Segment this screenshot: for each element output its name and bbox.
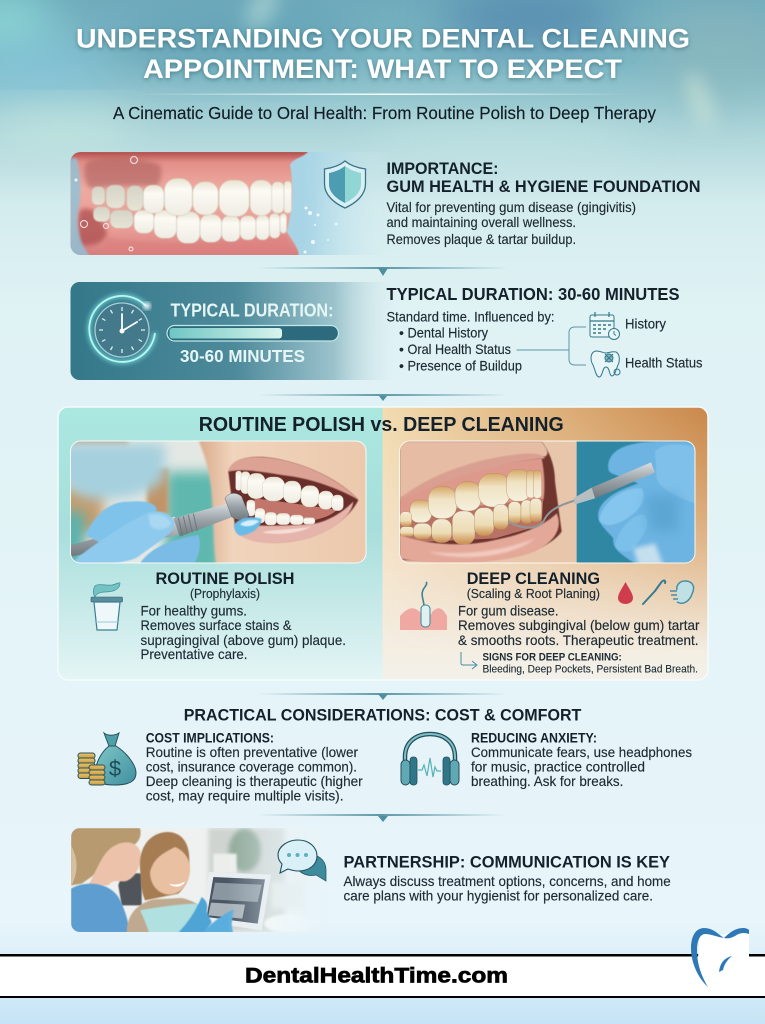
arrow: connector 3 <box>258 693 508 700</box>
heading: practical considerations: PRACTICAL CONSIDERATIONS: COST & COMFORT <box>184 706 582 724</box>
title <box>76 24 690 84</box>
icon: speech bubbles <box>278 840 326 881</box>
text: importance: Removes plaque & tartar buildup. <box>386 231 576 247</box>
text: reducing anxiety: REDUCING ANXIETY: <box>471 730 597 746</box>
text: routine polish <box>140 569 346 662</box>
text: signs for deep cleaning: Bleeding, Deep Pockets, Persistent Bad Breath. <box>482 664 698 676</box>
label: history: History <box>625 316 666 332</box>
text: reducing anxiety <box>471 730 692 789</box>
photo: healthy teeth <box>70 152 361 255</box>
photo: routine polish <box>71 442 366 562</box>
text: cost implications <box>146 730 363 804</box>
photo: deep cleaning <box>400 442 694 562</box>
text: duration details <box>386 284 680 374</box>
text: deep cleaning <box>458 569 700 648</box>
icon: dental pick <box>643 580 665 604</box>
label: typical duration: TYPICAL DURATION: <box>170 300 334 320</box>
icon: ear and breath <box>670 581 694 603</box>
progress bar <box>167 326 338 341</box>
text: partnership: care plans with your hygienist for personalized care. <box>344 888 653 904</box>
icon: headphones <box>401 734 459 785</box>
text: duration details: Dental History <box>408 324 488 340</box>
text: duration details: Oral Health Status <box>408 341 511 357</box>
text: importance: IMPORTANCE: <box>386 159 498 178</box>
text: partnership <box>344 852 671 904</box>
logo: tooth <box>691 928 749 987</box>
photo: hygienist and patient <box>71 828 296 932</box>
text: deep cleaning: For gum disease. <box>458 602 558 618</box>
text: duration details: • <box>399 358 404 374</box>
text: signs for deep cleaning <box>482 652 698 676</box>
text: cost implications: Deep cleaning is therapeutic (higher <box>146 773 363 789</box>
icon: clock <box>89 296 155 362</box>
text: duration details: Presence of Buildup <box>408 358 522 374</box>
bracket connector <box>516 327 586 365</box>
text: duration details: TYPICAL DURATION: 30-60 MINUTES <box>386 284 680 304</box>
footer site name: DentalHealthTime.com <box>245 964 508 988</box>
text: cost implications: cost, insurance coverage common). <box>146 758 357 774</box>
icon: gum with scaler <box>400 582 447 630</box>
text: routine polish: Removes surface stains & <box>140 617 292 633</box>
text: duration details: • <box>399 341 404 357</box>
text: cost implications: Routine is often preventative (lower <box>146 744 358 760</box>
footer band <box>0 954 765 998</box>
text: deep cleaning: & smooths roots. Therapeutic treatment. <box>458 632 698 648</box>
text: duration details: • <box>399 324 404 340</box>
icon: tooth <box>591 351 620 377</box>
text: duration details: Standard time. Influenced by: <box>386 308 554 324</box>
text: routine polish: Preventative care. <box>140 646 248 662</box>
icon: money bag and coins: $ <box>109 756 121 781</box>
icon: blood drop <box>618 582 633 604</box>
arrow: connector 4 <box>256 814 506 822</box>
text: deep cleaning: (Scaling & Root Planing) <box>467 587 600 601</box>
text: routine polish: For healthy gums. <box>140 602 247 618</box>
panel right half <box>382 407 708 680</box>
text: cost implications: cost, may require multiple visits). <box>146 788 344 804</box>
label: 30-60 minutes: 30-60 MINUTES <box>180 346 305 366</box>
text: partnership: Always discuss treatment options, concerns, and home <box>344 873 671 889</box>
text: deep cleaning: Removes subgingival (below gum) tartar <box>458 617 700 633</box>
panel: importance <box>70 152 701 256</box>
arrow: connector 2 <box>258 394 508 401</box>
text: reducing anxiety: breathing. Ask for breaks. <box>471 773 623 789</box>
icon: shield <box>324 161 366 208</box>
text: routine polish: (Prophylaxis) <box>190 587 260 601</box>
text: cost implications: COST IMPLICATIONS: <box>146 730 274 746</box>
arrow: signs <box>461 652 477 669</box>
icon: calendar <box>590 312 620 340</box>
icon: money bag and coins <box>78 733 136 785</box>
arrow: connector 1 <box>258 267 508 276</box>
label: health status: Health Status <box>625 354 702 370</box>
text: importance <box>386 159 700 247</box>
heading: ROUTINE POLISH vs. DEEP CLEANING <box>199 414 564 436</box>
text: reducing anxiety: for music, practice controlled <box>471 758 645 774</box>
text: routine polish: ROUTINE POLISH <box>156 569 294 588</box>
text: signs for deep cleaning: SIGNS FOR DEEP CLEANING: <box>482 652 622 664</box>
panel left half <box>58 407 382 680</box>
banner <box>70 282 400 380</box>
panel: routine polish vs deep cleaning <box>58 407 708 680</box>
text: importance: Vital for preventing gum disease (gingivitis) <box>386 199 636 215</box>
subtitle: A Cinematic Guide to Oral Health: From Routine Polish to Deep Therapy <box>113 103 656 123</box>
title: APPOINTMENT: WHAT TO EXPECT <box>143 54 622 84</box>
panel: typical duration <box>70 282 702 380</box>
text: importance: and maintaining overall wellness. <box>386 214 576 230</box>
text: reducing anxiety: Communicate fears, use headphones <box>471 744 692 760</box>
icon: polish cup <box>91 583 122 630</box>
text: routine polish: supragingival (above gum) plaque. <box>140 632 346 648</box>
text: partnership: PARTNERSHIP: COMMUNICATION IS KEY <box>344 852 671 872</box>
title: UNDERSTANDING YOUR DENTAL CLEANING <box>76 24 690 54</box>
text: deep cleaning: DEEP CLEANING <box>467 569 600 588</box>
text: importance: GUM HEALTH & HYGIENE FOUNDATION <box>386 177 700 196</box>
